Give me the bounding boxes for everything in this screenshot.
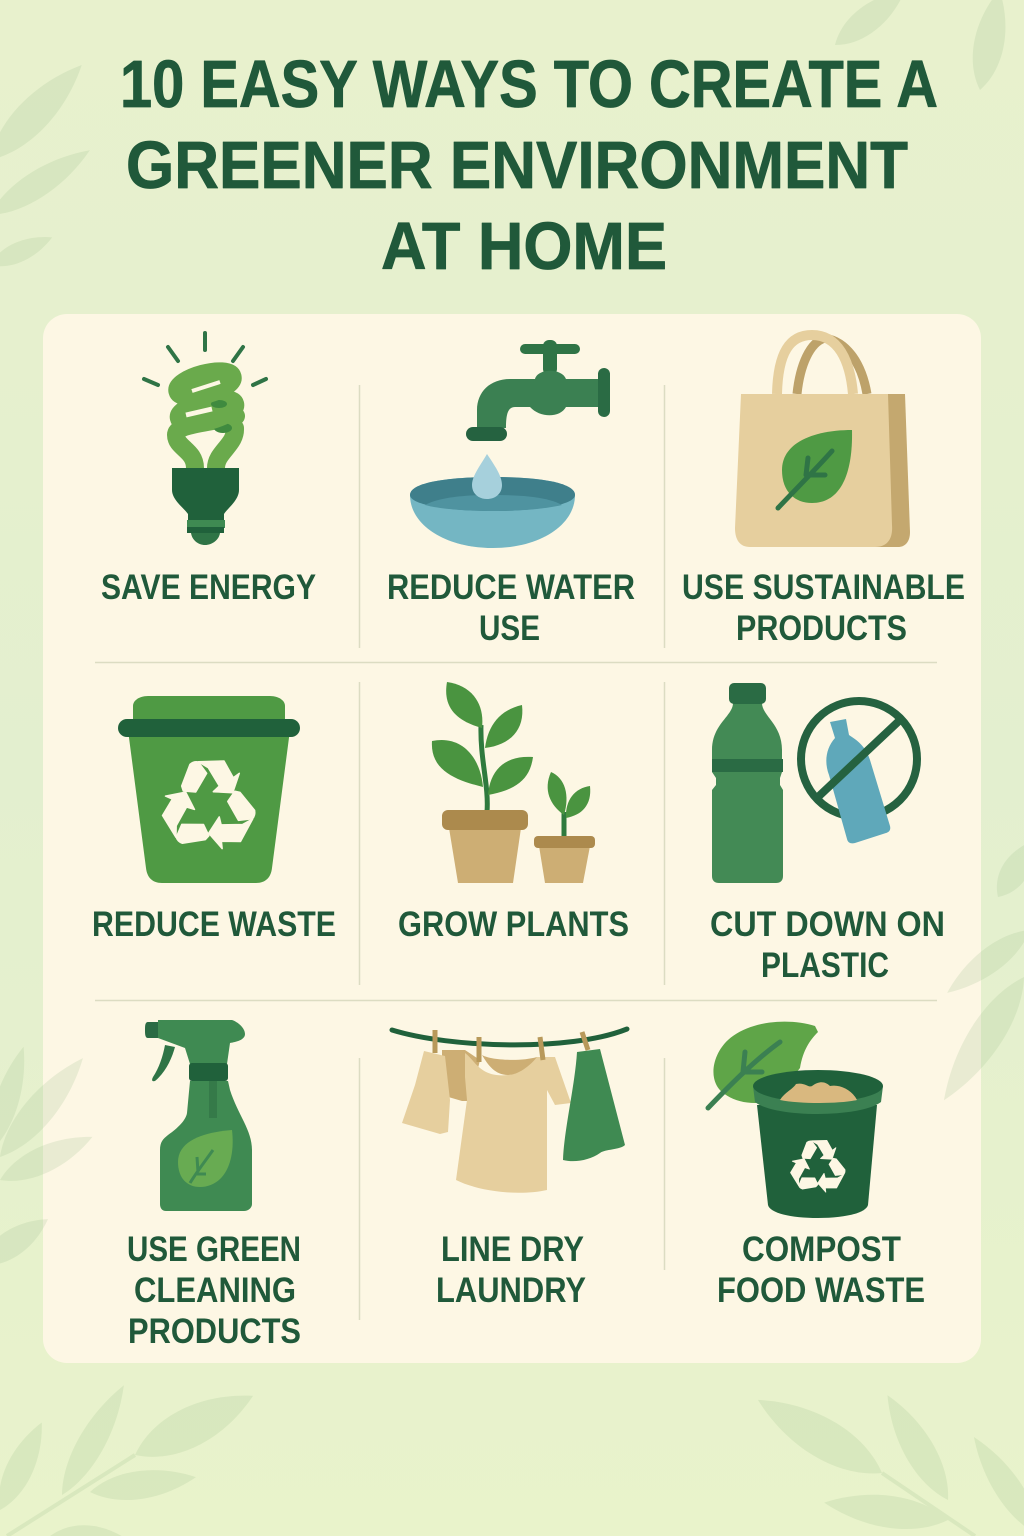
label: line dry laundry (436, 1230, 586, 1310)
tip: line dry laundry (392, 1029, 627, 1310)
label: compost food waste: FOOD WASTE (717, 1271, 925, 1310)
icon: recycle symbol small (786, 1140, 849, 1196)
label: grow plants: GROW PLANTS (398, 905, 629, 944)
label: compost food waste (717, 1230, 925, 1310)
icon: faucet and bowl (410, 340, 610, 548)
label: use sustainable products: PRODUCTS (736, 609, 907, 648)
tip: save energy (101, 333, 316, 607)
label: line dry laundry: LAUNDRY (436, 1271, 586, 1310)
label: cut down on plastic: CUT DOWN ON (710, 905, 945, 944)
tip: cut down on plastic (710, 683, 945, 985)
label: use green cleaning products (127, 1230, 301, 1351)
label: use green cleaning products: USE GREEN (127, 1230, 301, 1269)
label: use sustainable products (682, 568, 965, 648)
icon: tote bag (735, 335, 910, 547)
tip: use sustainable products (682, 335, 965, 648)
icon: recycle symbol (155, 761, 261, 855)
tip: use green cleaning products (127, 1020, 301, 1351)
title: AT HOME (381, 209, 667, 284)
icon: spray bottle (145, 1020, 252, 1211)
label: line dry laundry: LINE DRY (441, 1230, 584, 1269)
label: reduce water use: USE (479, 609, 540, 648)
panel: tips card (43, 314, 981, 1363)
label: use green cleaning products: PRODUCTS (128, 1312, 301, 1351)
icon: potted plants (432, 682, 595, 883)
tip: reduce waste (92, 696, 336, 944)
label: cut down on plastic (710, 905, 945, 985)
label: use green cleaning products: CLEANING (134, 1271, 296, 1310)
icon: plastic bottles (712, 683, 917, 883)
label: reduce water use: REDUCE WATER (387, 568, 635, 607)
tip: grow plants (398, 682, 629, 944)
icon: compost bin (708, 1022, 883, 1218)
title (120, 47, 938, 284)
tip: reduce water use (387, 340, 635, 648)
title: GREENER ENVIRONMENT (126, 128, 908, 203)
tips grid (92, 333, 965, 1351)
icon: clothesline (392, 1029, 627, 1193)
label: compost food waste: COMPOST (742, 1230, 901, 1269)
label: use sustainable products: USE SUSTAINABLE (682, 568, 965, 607)
tip: compost food waste (708, 1022, 925, 1310)
label: save energy: SAVE ENERGY (101, 568, 316, 607)
icon: recycling bin (118, 696, 300, 883)
label: reduce waste: REDUCE WASTE (92, 905, 336, 944)
label: cut down on plastic: PLASTIC (761, 946, 889, 985)
label: reduce water use (387, 568, 635, 648)
icon: light bulb (144, 333, 266, 545)
